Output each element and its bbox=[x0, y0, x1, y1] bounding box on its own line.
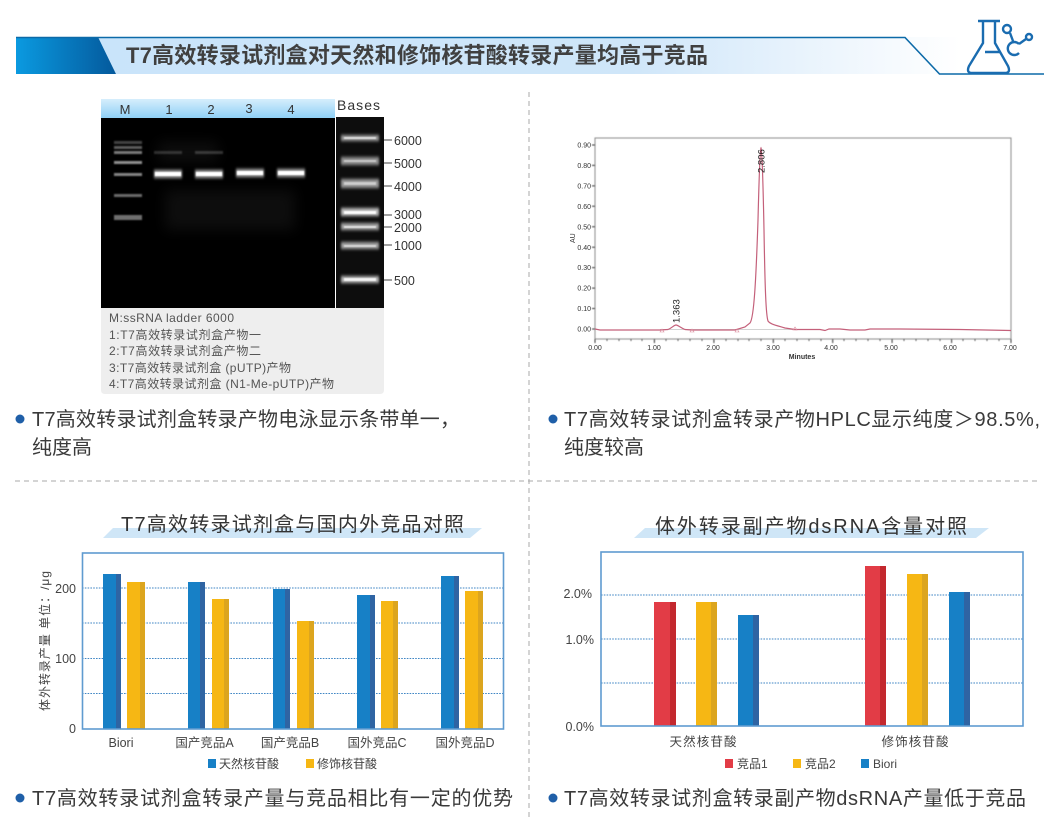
bar chart: dsRNA bbox=[601, 552, 1023, 726]
panel: dsRNA comparison chart bbox=[548, 515, 1026, 810]
y axis values: 1.0% bbox=[566, 633, 594, 647]
x axis labels: Minutes bbox=[789, 354, 815, 361]
y axis values: 2.0% bbox=[564, 587, 592, 601]
y axis values: 0.0% bbox=[566, 720, 594, 734]
legend: 修饰核苷酸 bbox=[317, 756, 377, 771]
y axis labels: 0.70 bbox=[577, 184, 591, 190]
chart heading: T7高效转录试剂盒与国内外竞品对照 bbox=[121, 513, 464, 536]
peak labels: 2.806 bbox=[756, 149, 768, 173]
marker sizes: 500 bbox=[394, 274, 415, 288]
category labels: Biori bbox=[108, 736, 134, 750]
marker sizes: 5000 bbox=[394, 157, 422, 171]
y axis labels: 0.40 bbox=[577, 245, 591, 252]
x axis labels: 2.00 bbox=[706, 345, 720, 352]
category labels: 修饰核苷酸 bbox=[882, 734, 949, 749]
y axis title: 体外转录产量 单位：/μg bbox=[37, 571, 52, 711]
marker sizes bbox=[337, 97, 422, 288]
peak labels bbox=[672, 149, 768, 323]
marker sizes: 6000 bbox=[394, 134, 422, 148]
legend: 天然核苷酸 bbox=[219, 756, 279, 771]
chart heading: 体外转录副产物dsRNA含量对照 bbox=[655, 515, 967, 538]
y axis values: 100 bbox=[55, 652, 76, 666]
y axis labels: 0.60 bbox=[577, 204, 591, 211]
bar chart: yield bbox=[82, 553, 504, 729]
bullet text: gel: 纯度高 bbox=[32, 436, 92, 459]
gel lane header: 4 bbox=[287, 102, 295, 117]
icon: flask and molecule bbox=[968, 21, 1032, 73]
x axis labels: 3.00 bbox=[766, 345, 780, 352]
gel lane header: 3 bbox=[245, 101, 253, 116]
legend bbox=[208, 756, 377, 771]
bullet text: HPLC: T7高效转录试剂盒转录产物HPLC显示纯度＞98.5%, bbox=[564, 408, 1040, 431]
panel: gel electrophoresis bbox=[16, 97, 460, 459]
natural nucleotide bars bbox=[103, 574, 459, 729]
marker sizes: Bases bbox=[337, 97, 380, 113]
x axis labels: 4.00 bbox=[824, 345, 838, 352]
bullet text: gel: T7高效转录试剂盒转录产物电泳显示条带单一， bbox=[32, 408, 460, 431]
bullet text: HPLC: 纯度较高 bbox=[564, 436, 644, 459]
category labels: 国产竞品B bbox=[261, 736, 319, 750]
category labels: 国产竞品A bbox=[175, 736, 234, 750]
marker sizes: 4000 bbox=[394, 180, 422, 194]
y axis labels: 0.30 bbox=[577, 265, 591, 272]
header banner bbox=[16, 37, 1044, 74]
axis title AU: AU bbox=[570, 233, 577, 243]
x axis labels: 7.00 bbox=[1003, 345, 1017, 352]
legend: 竞品2 bbox=[805, 757, 836, 771]
gel caption: 1:T7高效转录试剂盒产物一 bbox=[109, 327, 261, 342]
category labels bbox=[670, 734, 949, 749]
marker sizes: 3000 bbox=[394, 208, 422, 222]
y axis labels: 0.50 bbox=[577, 224, 591, 232]
y axis labels: 0.80 bbox=[577, 163, 591, 170]
gel lane header: 1 bbox=[165, 102, 173, 117]
x axis labels: 1.00 bbox=[647, 345, 661, 352]
y axis labels: 0.90 bbox=[577, 142, 591, 150]
x axis labels: 6.00 bbox=[943, 345, 957, 352]
y axis labels bbox=[577, 142, 591, 334]
gel lane header: 2 bbox=[207, 102, 215, 117]
x axis labels bbox=[588, 345, 1017, 361]
gel caption: 4:T7高效转录试剂盒 (N1-Me-pUTP)产物 bbox=[109, 376, 334, 391]
Biori bars bbox=[738, 592, 970, 726]
bullet text: gel bbox=[16, 408, 460, 459]
competitor 2 bars bbox=[696, 574, 928, 726]
bullet text: yield: T7高效转录试剂盒转录产量与竞品相比有一定的优势 bbox=[32, 787, 513, 810]
gel caption bbox=[101, 308, 384, 394]
y axis values bbox=[564, 587, 594, 734]
marker ladder image bbox=[336, 117, 384, 308]
x axis labels: 5.00 bbox=[884, 345, 898, 352]
category labels bbox=[108, 736, 495, 750]
peak labels: 1.363 bbox=[672, 299, 682, 323]
panel: yield comparison chart bbox=[16, 513, 513, 810]
y axis labels: 0.00 bbox=[577, 326, 591, 334]
plot frame and ticks bbox=[592, 138, 1011, 343]
y axis values: 200 bbox=[55, 582, 76, 596]
y axis labels: 0.20 bbox=[577, 286, 591, 292]
category labels: 国外竞品C bbox=[347, 736, 407, 750]
gel caption: 2:T7高效转录试剂盒产物二 bbox=[109, 343, 261, 358]
y axis labels: 0.10 bbox=[577, 306, 591, 313]
gel lane header: M bbox=[120, 102, 130, 117]
competitor 1 bars bbox=[654, 566, 886, 726]
marker sizes: 1000 bbox=[394, 239, 422, 253]
gel image bbox=[101, 118, 335, 308]
legend bbox=[725, 757, 897, 771]
bullet text: dsRNA: T7高效转录试剂盒转录副产物dsRNA产量低于竞品 bbox=[564, 787, 1026, 810]
chromatogram trace bbox=[595, 148, 1011, 332]
y axis values bbox=[55, 582, 76, 736]
legend: Biori bbox=[873, 757, 897, 771]
gel caption: M:ssRNA ladder 6000 bbox=[109, 311, 234, 325]
y axis values: 0 bbox=[69, 722, 76, 736]
legend: 竞品1 bbox=[737, 757, 768, 771]
gel caption: 3:T7高效转录试剂盒 (pUTP)产物 bbox=[109, 360, 291, 375]
gel lane header bbox=[101, 99, 335, 118]
modified nucleotide bars bbox=[127, 582, 483, 729]
x axis labels: 0.00 bbox=[588, 345, 602, 352]
category labels: 天然核苷酸 bbox=[670, 734, 737, 749]
title: T7高效转录试剂盒对天然和修饰核苷酸转录产量均高于竞品 bbox=[126, 43, 708, 68]
panel: HPLC chromatogram bbox=[548, 138, 1040, 459]
marker sizes: 2000 bbox=[394, 221, 422, 235]
category labels: 国外竞品D bbox=[435, 736, 495, 750]
bullet text: HPLC bbox=[548, 408, 1040, 459]
